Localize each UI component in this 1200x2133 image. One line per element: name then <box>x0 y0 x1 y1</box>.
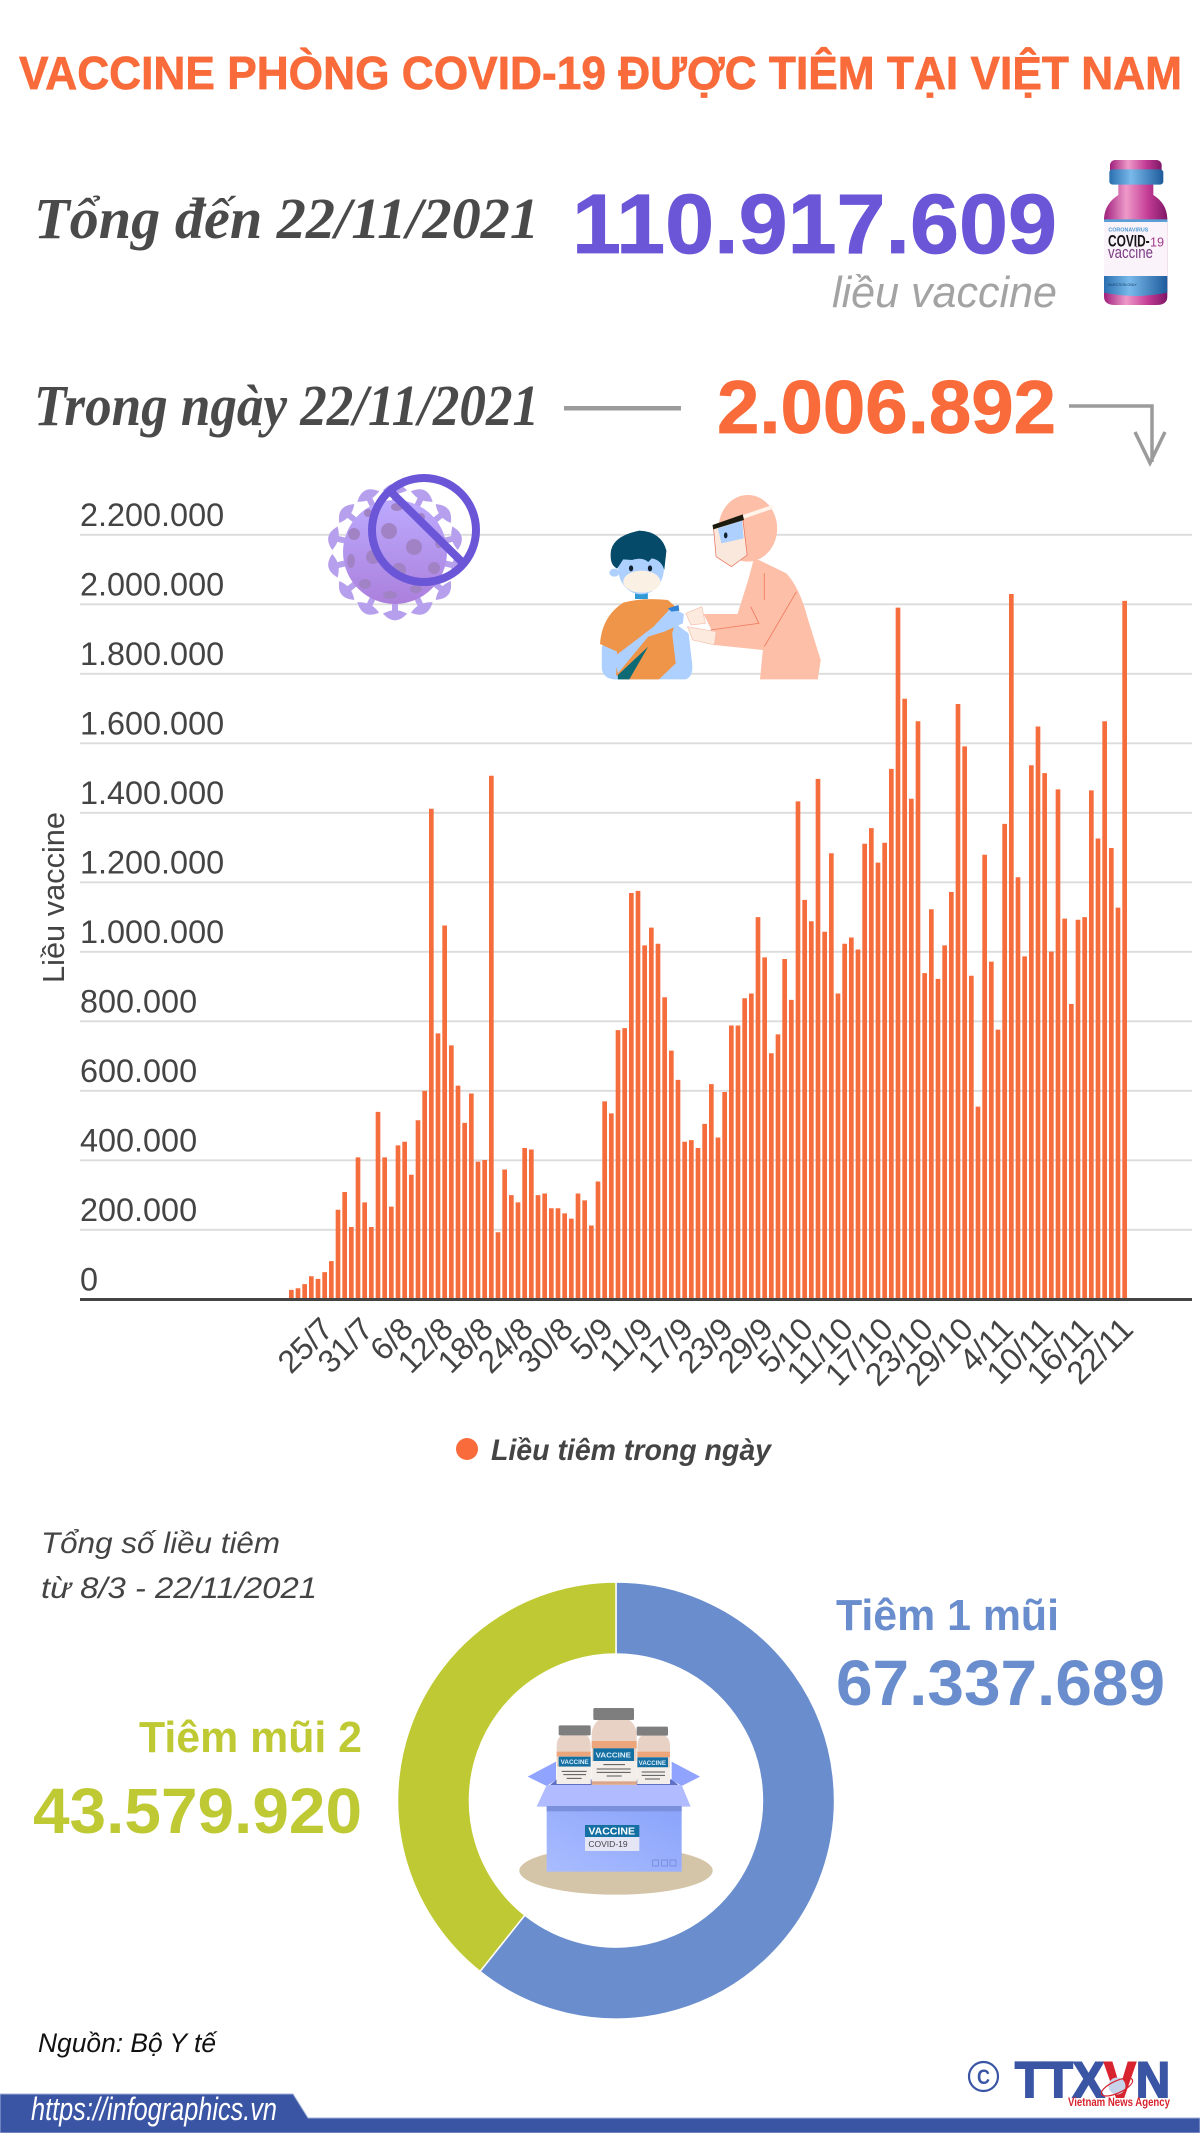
segment: second dose <box>398 1582 616 1972</box>
y-axis labels: 1.400.000 <box>80 775 224 811</box>
icon: vaccine vial: INJECTION ONLY <box>1108 283 1137 287</box>
first dose number: 67.337.689 <box>836 1647 1165 1719</box>
box label <box>585 1825 639 1851</box>
x-axis date labels: 5/10 <box>750 1310 820 1380</box>
x-axis date labels: 22/11 <box>1060 1310 1140 1391</box>
logo: TTXVN: TTXVN <box>1015 2052 1170 2108</box>
x-axis date labels: 11/10 <box>780 1310 860 1391</box>
x-axis date labels: 12/8 <box>390 1310 460 1380</box>
x-axis date labels: 25/7 <box>270 1310 340 1380</box>
y-axis labels: 400.000 <box>80 1123 197 1159</box>
x-axis date labels: 30/8 <box>510 1310 580 1380</box>
x-axis date labels: 29/9 <box>710 1310 780 1380</box>
icon: vaccine vial <box>1104 160 1167 305</box>
y-axis labels: 2.200.000 <box>80 497 224 533</box>
x-axis date labels <box>270 1310 1140 1393</box>
icon: crossed-out virus <box>327 478 476 619</box>
legend: Liều tiêm trong ngày <box>491 1434 772 1467</box>
y-axis labels: 1.800.000 <box>80 636 224 672</box>
x-axis line <box>80 1298 1192 1301</box>
x-axis date labels: 5/9 <box>563 1310 620 1367</box>
x-axis date labels: 24/8 <box>470 1310 540 1380</box>
x-axis date labels: 23/10 <box>858 1310 940 1393</box>
boy <box>600 531 692 679</box>
x-axis date labels: 23/9 <box>670 1310 740 1380</box>
x-axis date labels: 29/10 <box>898 1310 980 1393</box>
nurse <box>686 495 821 679</box>
label: second dose: Tiêm mũi 2 <box>139 1713 362 1762</box>
vial center <box>592 1708 637 1785</box>
title: VACCINE PHÒNG COVID-19 ĐƯỢC TIÊM TẠI VIỆT NAM <box>19 47 1182 99</box>
x-axis date labels: 10/11 <box>980 1310 1060 1391</box>
box label: COVID-19 <box>588 1839 628 1849</box>
illustration: nurse vaccinating a boy <box>600 495 821 679</box>
vial left <box>557 1725 591 1784</box>
y-axis labels: 2.000.000 <box>80 567 224 603</box>
footer band <box>0 2091 1200 2133</box>
icon: vaccine vial: CORONAVIRUS <box>1108 227 1149 233</box>
y-axis labels: 1.200.000 <box>80 845 224 881</box>
icon: vaccine vial: 19 <box>1150 236 1164 250</box>
box label: VACCINE <box>588 1827 636 1838</box>
vial right: VACCINE <box>639 1760 666 1767</box>
website url: https://infographics.vn <box>31 2091 277 2127</box>
vial center: VACCINE <box>596 1751 631 1760</box>
x-axis date labels: 17/9 <box>630 1310 700 1380</box>
label: first dose: Tiêm 1 mũi <box>836 1591 1059 1640</box>
icon: vaccine box <box>519 1708 713 1895</box>
y-axis labels: 0 <box>80 1262 98 1298</box>
total doses number: 110.917.609 <box>572 177 1057 271</box>
y-axis labels: 1.600.000 <box>80 706 224 742</box>
donut caption: từ 8/3 - 22/11/2021 <box>41 1572 317 1605</box>
y-axis labels <box>80 497 224 1298</box>
arrow down to chart <box>1069 406 1165 463</box>
donut chart <box>398 1582 835 2019</box>
daily doses number: 2.006.892 <box>717 365 1056 449</box>
y-axis labels: 800.000 <box>80 984 197 1020</box>
x-axis date labels: 11/9 <box>592 1310 660 1378</box>
donut caption <box>41 1527 317 1605</box>
y-axis labels: 600.000 <box>80 1053 197 1089</box>
x-axis date labels: 6/8 <box>363 1310 420 1367</box>
y-axis title: Liều vaccine <box>36 812 71 983</box>
x-axis date labels: 16/11 <box>1020 1310 1100 1391</box>
y-axis labels: 200.000 <box>80 1192 197 1228</box>
logo: TTXVN: C <box>977 2066 990 2089</box>
icon: vaccine vial: COVID- <box>1108 232 1150 251</box>
connector line <box>564 406 681 410</box>
icon: vaccine vial: vaccine <box>1108 243 1153 262</box>
doses unit caption: liều vaccine <box>832 268 1057 317</box>
bars <box>291 594 1125 1299</box>
x-axis date labels: 31/7 <box>310 1310 380 1380</box>
x-axis date labels: 18/8 <box>430 1310 500 1380</box>
logo: TTXVN: Vietnam News Agency <box>1068 2095 1170 2109</box>
label: today: Trong ngày 22/11/2021 <box>34 373 539 438</box>
x-axis date labels: 17/10 <box>818 1310 900 1393</box>
chart gridlines <box>80 535 1192 1230</box>
y-axis labels: 1.000.000 <box>80 914 224 950</box>
chart: daily vaccine doses <box>36 497 1192 1393</box>
source: Nguồn: Bộ Y tế <box>38 2028 218 2058</box>
vial right <box>637 1727 670 1784</box>
vial left: VACCINE <box>561 1759 589 1766</box>
second dose number: 43.579.920 <box>33 1775 362 1847</box>
x-axis date labels: 4/11 <box>952 1310 1020 1378</box>
segment: first dose <box>480 1582 835 2019</box>
label: total to date: Tổng đến 22/11/2021 <box>34 186 539 251</box>
donut caption: Tổng số liều tiêm <box>41 1527 280 1560</box>
